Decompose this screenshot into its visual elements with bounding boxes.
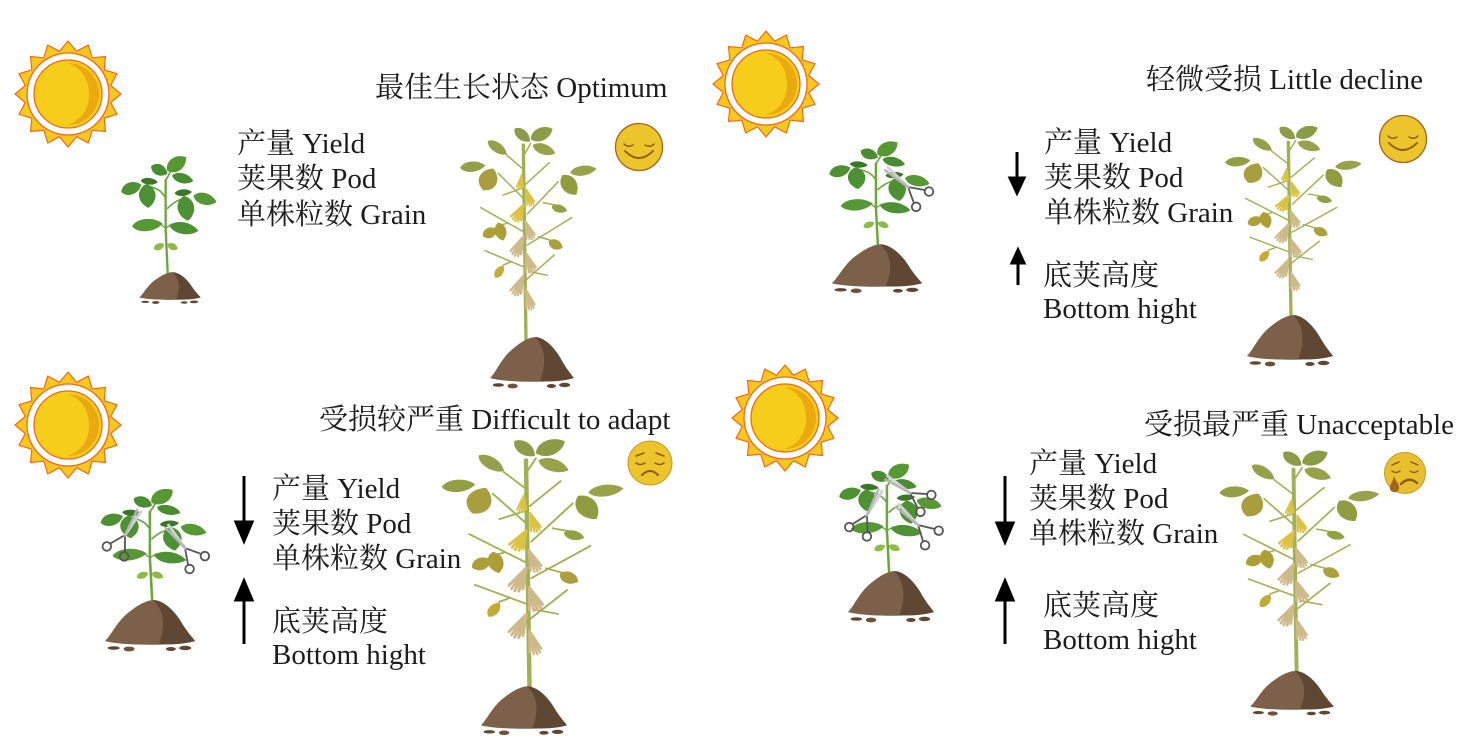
panel: little decline <box>713 31 1426 366</box>
arrow: down <box>1010 152 1024 193</box>
text block: bottom pod height: 底荚高度 <box>1043 589 1159 622</box>
text block: bottom pod height <box>272 605 426 671</box>
text block: bottom pod height <box>1043 259 1197 325</box>
arrow: down <box>236 476 252 541</box>
icon: sun <box>713 31 819 137</box>
arrow: up <box>236 581 252 644</box>
icon: crying face <box>1384 452 1426 494</box>
text block: yield metrics: 单株粒数 Grain <box>1029 517 1219 550</box>
seedling plant with scissors <box>98 484 211 651</box>
panel: unacceptable <box>732 365 1454 716</box>
text block: yield metrics: 单株粒数 Grain <box>272 542 462 575</box>
title: optimum: 最佳生长状态 Optimum <box>375 71 668 104</box>
text block: yield metrics: 荚果数 Pod <box>1044 161 1184 194</box>
text block: yield metrics: 单株粒数 Grain <box>1044 196 1234 229</box>
mature plant <box>1219 447 1380 716</box>
title: difficult to adapt: 受损较严重 Difficult to adapt <box>319 403 670 436</box>
seedling plant with scissors <box>837 459 945 622</box>
title: unacceptable: 受损最严重 Unacceptable <box>1144 408 1454 441</box>
text block: bottom pod height: Bottom hight <box>1043 293 1197 325</box>
text block: bottom pod height <box>1043 589 1197 656</box>
text block: yield metrics <box>272 472 462 575</box>
mature plant <box>1225 122 1362 366</box>
text block: bottom pod height: Bottom hight <box>272 639 426 671</box>
text block: yield metrics <box>1029 447 1219 550</box>
icon: sun <box>15 41 121 147</box>
text block: bottom pod height: Bottom hight <box>1043 624 1197 656</box>
text block: yield metrics: 产量 Yield <box>237 127 366 160</box>
mature plant <box>460 123 597 388</box>
arrow: up <box>997 581 1013 644</box>
text block: yield metrics <box>237 127 427 231</box>
seedling plant with scissors <box>827 137 935 293</box>
panel: difficult to adapt <box>15 372 672 735</box>
text block: yield metrics: 产量 Yield <box>1029 447 1158 480</box>
text block: yield metrics: 单株粒数 Grain <box>237 198 427 231</box>
icon: sad face <box>628 441 672 485</box>
text block: bottom pod height: 底荚高度 <box>1043 259 1159 292</box>
seedling plant <box>119 152 218 304</box>
icon: smiling face <box>616 124 662 170</box>
arrow: up <box>1012 250 1024 285</box>
text block: yield metrics: 产量 Yield <box>272 472 401 505</box>
icon: sun <box>15 372 121 478</box>
text block: bottom pod height: 底荚高度 <box>272 605 388 638</box>
text block: yield metrics <box>1044 126 1234 229</box>
text block: yield metrics: 产量 Yield <box>1044 126 1173 159</box>
panel: optimum <box>15 41 668 388</box>
arrow: down <box>997 476 1013 542</box>
icon: sun <box>732 365 838 471</box>
text block: yield metrics: 荚果数 Pod <box>1029 482 1169 515</box>
icon: smiling face <box>1380 116 1426 162</box>
title: little decline: 轻微受损 Little decline <box>1146 63 1423 96</box>
text block: yield metrics: 荚果数 Pod <box>237 162 377 195</box>
mature plant <box>441 434 624 735</box>
text block: yield metrics: 荚果数 Pod <box>272 507 412 540</box>
